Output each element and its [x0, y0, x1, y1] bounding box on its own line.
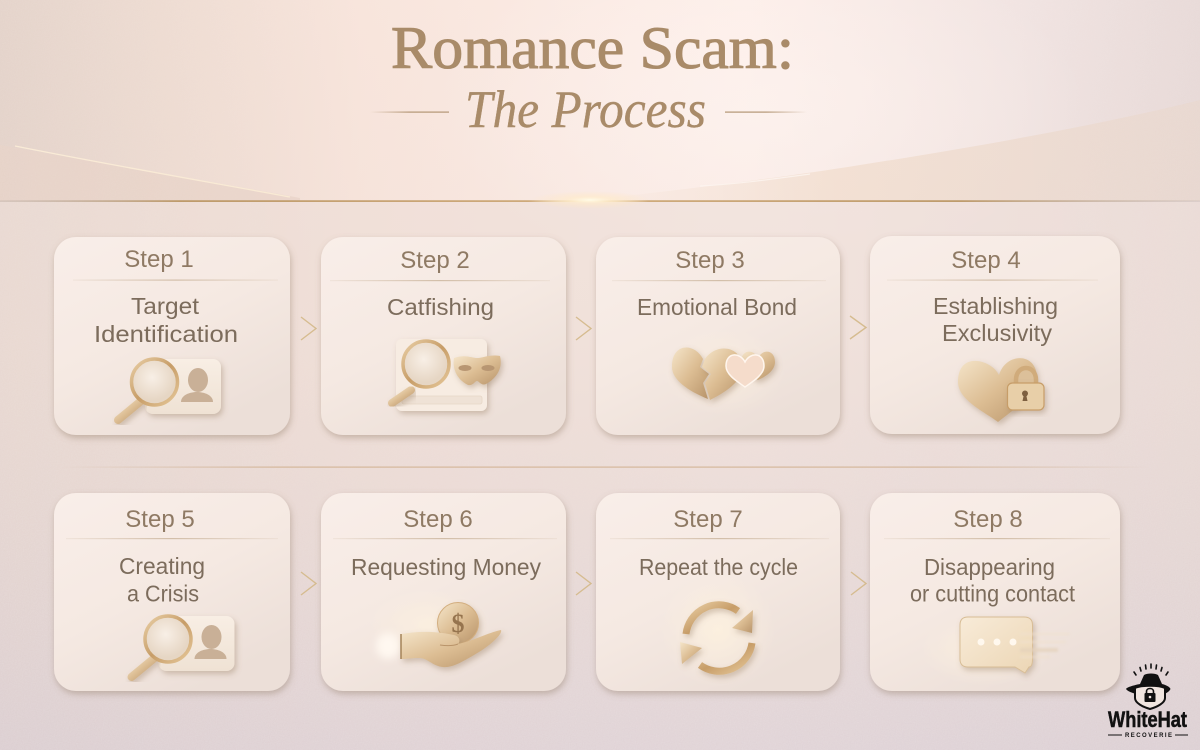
icon: heart with padlock	[958, 358, 1044, 422]
arrow: step 2 to 3	[576, 317, 591, 340]
arrow: step 7 to 8	[851, 572, 866, 595]
arrow: step 6 to 7	[576, 572, 591, 595]
icon: fading chat bubble	[920, 614, 1070, 686]
title: Romance Scam:	[391, 15, 794, 82]
header rule	[0, 191, 1200, 209]
panel: step 8: Disappearing	[924, 554, 1055, 580]
panel: step 3: Emotional Bond	[637, 294, 797, 320]
panel: step 2: Catfishing	[387, 294, 494, 320]
row rule	[60, 466, 1150, 468]
icon: magnifier over profile card	[132, 616, 234, 677]
arrow: step 3 to 4	[850, 316, 866, 339]
arrow: step 1 to 2	[301, 317, 316, 340]
icon: magnifier over profile card	[118, 359, 221, 420]
panel: step 6	[321, 493, 566, 691]
panel: step 5: Step 5	[125, 506, 195, 533]
panel: step 3: Step 3	[675, 247, 745, 274]
title: The Process	[465, 81, 706, 139]
panel: step 1: Step 1	[124, 246, 194, 273]
panel: step 6: Step 6	[403, 506, 473, 533]
logo: WhiteHat Recoverie	[1108, 664, 1188, 739]
panel: step 2: Step 2	[400, 247, 470, 274]
icon: broken heart and small heart	[662, 328, 786, 416]
panel: step 7: Step 7	[673, 506, 743, 533]
panel: step 4: Establishing	[933, 293, 1058, 319]
panel: step 4: Exclusivity	[942, 320, 1053, 346]
logo: WhiteHat Recoverie: RECOVERIE	[1125, 733, 1172, 739]
panel: step 8: Step 8	[953, 506, 1023, 533]
panel: step 8	[870, 493, 1120, 691]
panel: step 1	[54, 237, 290, 435]
panel: step 8: or cutting contact	[910, 580, 1076, 606]
panel: step 4	[870, 236, 1120, 434]
panel: step 5	[54, 493, 290, 691]
panel: step 3	[596, 237, 840, 435]
panel: step 5: a Crisis	[127, 580, 199, 606]
icon: hand holding coin	[368, 589, 501, 667]
icon: magnifier and mask	[392, 339, 501, 411]
icon: hand holding coin: $	[452, 609, 464, 638]
icon: repeat cycle arrows	[660, 572, 776, 688]
panel: step 5: Creating	[119, 553, 205, 579]
panel: step 7: Repeat the cycle	[639, 554, 798, 580]
panel: step 4: Step 4	[951, 247, 1021, 274]
panel: step 7	[596, 493, 840, 691]
arrow: step 5 to 6	[301, 572, 316, 595]
panel: step 1: Identification	[94, 321, 238, 347]
panel: step 2	[321, 237, 566, 435]
title	[370, 15, 807, 139]
panel: step 6: Requesting Money	[351, 554, 541, 580]
panel: step 1: Target	[131, 293, 200, 319]
